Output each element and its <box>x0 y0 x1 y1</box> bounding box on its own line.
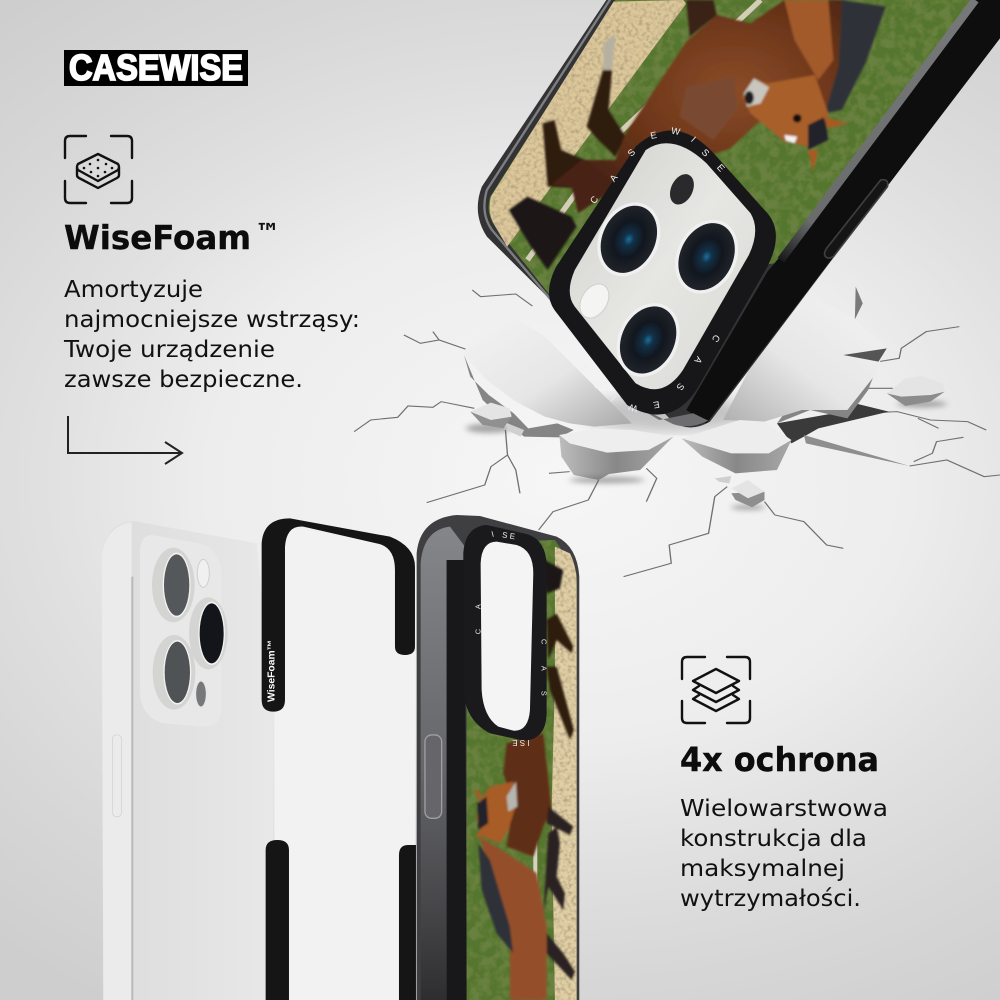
logo background <box>64 50 248 86</box>
horse muzzle <box>744 78 769 107</box>
picture: sand <box>552 547 577 1000</box>
ring lettering lower: I <box>608 394 618 404</box>
horse <box>509 0 886 270</box>
camera island black ring <box>549 131 776 415</box>
ring lettering upper: E <box>715 162 727 174</box>
ring lettering lower: C <box>710 333 723 345</box>
ring lettering upper: I <box>689 134 698 144</box>
left slab edge <box>464 355 574 437</box>
horse flank highlight <box>680 77 737 140</box>
ring lettering upper: S <box>700 146 712 159</box>
horse tail <box>542 558 563 593</box>
rock bottom <box>731 480 764 507</box>
rock small bottom <box>715 476 731 483</box>
horse foreleg <box>686 0 717 37</box>
ring lettering lower: S <box>591 380 604 392</box>
case side band <box>421 527 465 1000</box>
camera ring window <box>481 542 533 731</box>
phone outer body <box>478 0 1000 427</box>
lower rim translucent corner <box>619 397 708 426</box>
right rim black band <box>686 0 1000 423</box>
text block: 4x ochrona description: wytrzymałości. <box>680 886 861 912</box>
text block: 4x ochrona description: maksymalnej <box>680 856 845 882</box>
horse body <box>551 0 845 213</box>
horse ear lower <box>475 827 483 838</box>
text block: WiseFoam description: Twoje urządzenie <box>63 337 275 363</box>
ring lettering lower: E <box>578 361 590 373</box>
ring lettering: I <box>490 530 495 539</box>
right slab <box>723 300 885 422</box>
iPhone edge line <box>129 577 135 1000</box>
flash unit <box>197 559 209 587</box>
crack lines <box>354 290 1000 577</box>
horse tail <box>509 197 576 270</box>
centre right shard side <box>682 438 791 473</box>
case: body <box>417 515 579 1000</box>
ring lettering upper: W <box>670 125 681 137</box>
rock small left <box>508 423 524 437</box>
silver lens surrounds <box>152 548 228 710</box>
text block: 4x ochrona description: konstrukcja dla <box>680 826 867 852</box>
camera plateau <box>140 535 222 727</box>
horse mane <box>825 0 886 113</box>
case black edge <box>447 560 467 1000</box>
right slab notch <box>843 348 887 362</box>
horse blaze <box>784 135 797 143</box>
ring lettering upper: E <box>649 129 658 141</box>
ring lettering <box>474 530 548 747</box>
ring lettering: S E <box>502 531 516 541</box>
horse head <box>477 782 517 843</box>
ring lettering: A <box>539 666 548 671</box>
horse hind legs <box>543 33 625 188</box>
impact shadow <box>582 395 748 432</box>
ring lettering lower: E <box>652 399 661 411</box>
lens middle <box>198 602 225 665</box>
heading: WiseFoam: ™ <box>255 218 280 247</box>
fence rail <box>533 840 537 883</box>
lidar sensor <box>665 170 699 208</box>
heading: 4x ochrona: 4x ochrona <box>680 740 879 779</box>
horse nostril <box>744 91 754 104</box>
black foam strip top <box>262 518 415 712</box>
camera ring outer <box>463 525 547 741</box>
picture: fence rails <box>527 0 761 260</box>
rock shadows <box>466 401 947 510</box>
horse eye <box>793 114 802 123</box>
centre right shard top <box>682 420 791 453</box>
camera island plate <box>570 143 755 389</box>
ring lettering upper: C <box>587 194 600 206</box>
ring lettering lower <box>578 333 723 415</box>
text block: WiseFoam description: zawsze bezpieczne. <box>64 367 303 393</box>
ring lettering: I S E <box>512 738 530 747</box>
ring lettering upper: A <box>607 171 620 184</box>
white iPhone body <box>102 521 273 1000</box>
sensor <box>195 681 207 707</box>
horse rear legs <box>547 613 574 740</box>
right rim highlight <box>781 0 975 260</box>
iPhone side button <box>113 735 121 817</box>
rock left <box>470 403 512 428</box>
horse mane <box>478 843 513 953</box>
text block: 4x ochrona description <box>680 796 888 912</box>
ring lettering lower: W <box>627 402 639 415</box>
horse <box>474 558 575 1000</box>
centre left shard top <box>559 428 673 453</box>
text block: WiseFoam description: Amortyzuje <box>64 277 203 303</box>
icon: layers in brackets <box>682 657 750 723</box>
ring lettering upper <box>587 125 727 206</box>
ring lettering: A <box>474 604 483 609</box>
ring lettering lower: A <box>692 355 705 367</box>
horse ear <box>474 788 482 803</box>
text block: WiseFoam description: najmocniejsze wstrząsy: <box>64 307 360 333</box>
right slab shard <box>855 287 863 319</box>
picture: green field <box>467 540 577 1000</box>
right slab edge <box>777 363 878 423</box>
picture: sand <box>490 0 686 247</box>
horse forelock <box>477 797 488 830</box>
horse ears <box>808 117 848 172</box>
lens lower <box>163 640 191 705</box>
rock right <box>887 376 945 406</box>
dark crack wedge <box>777 404 889 443</box>
side button <box>825 180 888 258</box>
logo <box>64 47 248 88</box>
iPhone side strip <box>102 522 132 1000</box>
WiseFoam label: WiseFoam™ <box>266 640 277 702</box>
left slab <box>464 318 632 427</box>
logo text: CASEWISE <box>69 47 243 88</box>
horse body <box>503 733 552 857</box>
ring lettering: C <box>474 628 483 634</box>
centre left shard side <box>559 435 673 480</box>
case side button <box>425 735 442 818</box>
text block: 4x ochrona description: Wielowarstwowa <box>680 796 888 822</box>
ring lettering: S <box>539 691 548 696</box>
horse muzzle <box>507 782 517 812</box>
black foam strip bottom right <box>399 845 416 1000</box>
bottom left: exploded case view <box>102 515 579 1000</box>
black foam strip bottom left <box>266 840 289 1000</box>
arrow <box>68 416 182 464</box>
grey side highlight left <box>484 0 612 300</box>
horse chest and neck <box>480 837 547 1000</box>
picture: green field <box>489 0 974 297</box>
lens top-left <box>585 192 672 286</box>
ring lettering upper: S <box>625 146 637 159</box>
top phone: rotated case impacting the wall <box>478 0 1000 427</box>
wall cracks illustration <box>354 287 1000 577</box>
flash <box>574 279 615 323</box>
horse neck highlight <box>784 0 833 80</box>
ring lettering: C <box>539 639 548 645</box>
lens upper <box>163 553 191 617</box>
horse head <box>742 75 828 147</box>
heading: WiseFoam: WiseFoam <box>64 218 251 257</box>
horse legs front <box>543 807 575 980</box>
text block: WiseFoam description <box>63 277 360 393</box>
transparent foam panel <box>274 527 415 1000</box>
lens right <box>663 210 750 304</box>
grey wedge <box>804 435 910 466</box>
icon: foam pad in brackets <box>65 136 132 203</box>
ring lettering lower: S <box>674 381 687 393</box>
lens bottom <box>605 293 692 387</box>
horse forelock <box>808 117 828 150</box>
